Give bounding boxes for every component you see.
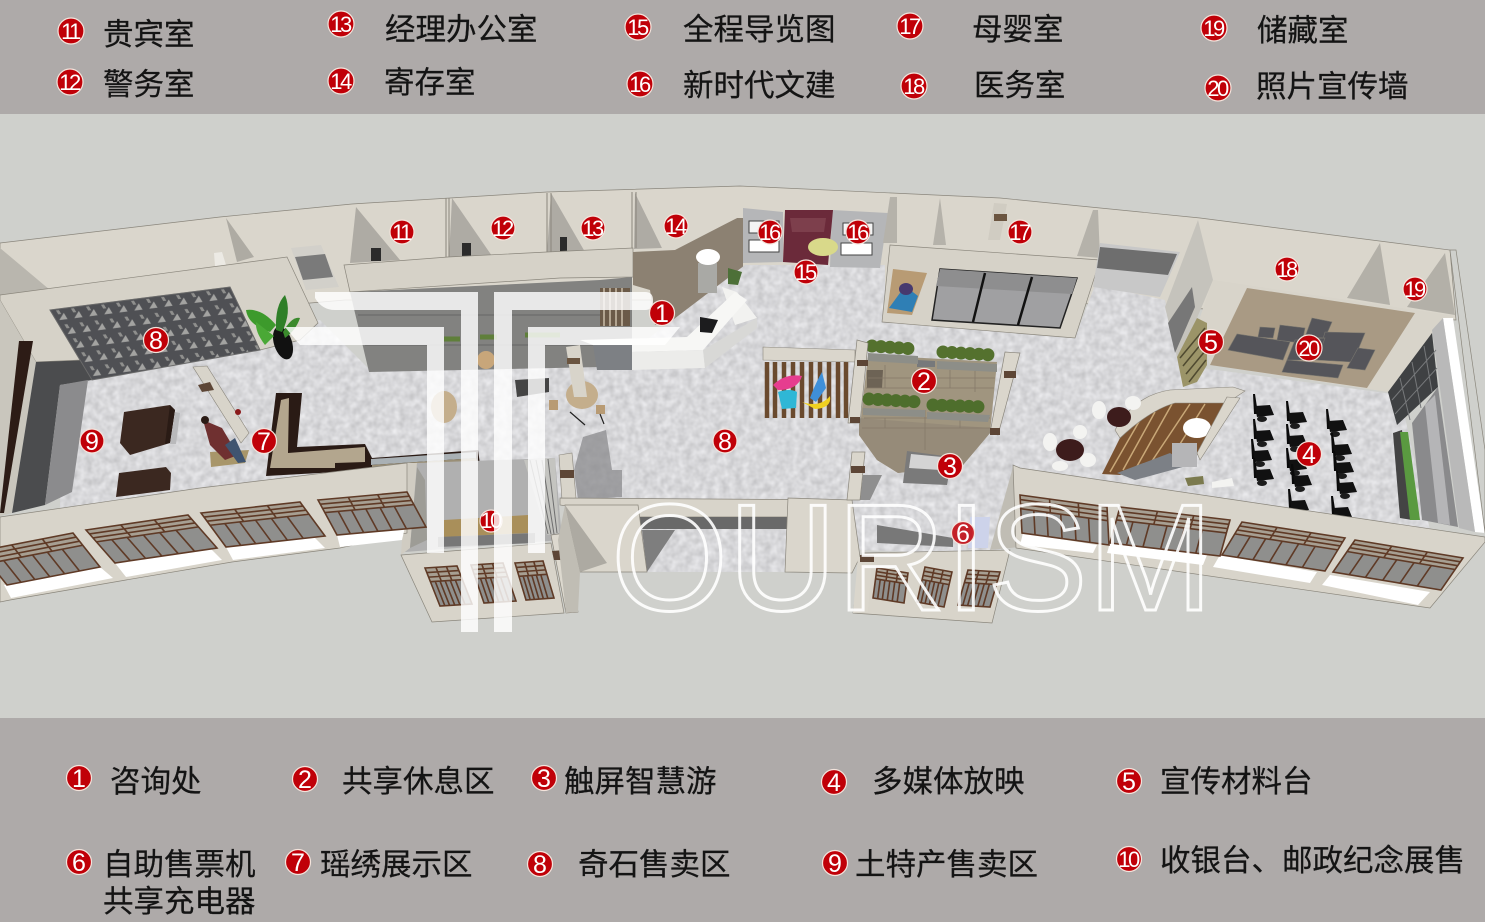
legend texts rooms 11 to 20: 全程导览图 [683, 13, 836, 47]
pillars at rest area [848, 340, 1020, 435]
grey door recess [1093, 243, 1180, 297]
map markers: 7 [257, 428, 271, 456]
legend markers 11 to 20: 20 [1207, 76, 1229, 101]
legend texts rooms 11 to 20 [103, 13, 1408, 104]
rest area wood platform [859, 355, 997, 473]
planter strip [444, 335, 560, 339]
legend markers 11 to 20: 15 [627, 15, 649, 40]
narrow recess box [291, 245, 339, 290]
legend markers 11 to 20: 14 [330, 69, 352, 94]
map markers: 19 [1404, 277, 1426, 302]
legend markers 1 to 10: 10 [1118, 847, 1140, 872]
wall box above glass doors [882, 245, 1100, 338]
legend texts areas 1 to 10: 咨询处 [110, 765, 202, 799]
map markers: 2 [917, 368, 931, 396]
right front wall [1013, 465, 1485, 608]
dark band behind the cafe [350, 277, 632, 372]
outer right wall line [1450, 250, 1485, 533]
decorative stripe wall [600, 288, 630, 326]
legend texts rooms 11 to 20: 照片宣传墙 [1256, 70, 1408, 104]
panel: bottom legend [0, 718, 1485, 922]
partition wall with grey panel [1165, 220, 1213, 357]
left end wall [0, 300, 92, 516]
photo wall tan carpet [1210, 288, 1415, 388]
legend markers 1 to 10: 7 [291, 849, 305, 877]
legend texts areas 1 to 10: 触屏智慧游 [564, 765, 716, 799]
legend markers 1 to 10: 4 [827, 769, 841, 797]
left white base strips [4, 527, 405, 598]
map markers: 4 [1302, 441, 1316, 469]
floor plan building [0, 186, 1485, 623]
legend texts rooms 11 to 20: 警务室 [103, 68, 194, 102]
leaflet shelf [1177, 318, 1207, 387]
legend texts rooms 11 to 20: 寄存室 [384, 66, 476, 100]
right entrance room 6 details [877, 467, 1020, 550]
entrance box left [401, 533, 578, 622]
photo wall frames [1228, 318, 1375, 378]
room 14 wooden wall [633, 218, 743, 325]
rock wall grid [50, 287, 260, 380]
legend markers 1 to 10: 6 [72, 849, 86, 877]
map markers [80, 214, 1427, 548]
legend texts rooms 11 to 20: 医务室 [974, 69, 1066, 103]
legend markers 1 to 10: 2 [298, 766, 312, 794]
legend texts areas 1 to 10: 多媒体放映 [872, 765, 1024, 799]
legend markers 11 to 20: 17 [899, 14, 921, 39]
map markers: 15 [795, 260, 817, 285]
panel: top legend [0, 0, 1485, 114]
legend markers 1 to 10: 9 [828, 850, 842, 878]
legend texts areas 1 to 10: 共享休息区 [342, 765, 494, 799]
legend markers 11 to 20: 16 [629, 72, 651, 97]
right white base strips [1020, 533, 1430, 605]
legend markers 1 to 10: 8 [533, 851, 547, 879]
map markers: 3 [943, 453, 957, 481]
map markers: 18 [1276, 257, 1298, 282]
guide map poster [783, 210, 838, 265]
reception counter [580, 287, 757, 370]
legend markers 11 to 20: 12 [59, 70, 81, 95]
legend texts areas 1 to 10: 自助售票机 [103, 848, 256, 882]
rooms front wall band [344, 248, 633, 292]
legend texts areas 1 to 10 [103, 765, 1465, 919]
legend markers 11 to 20: 18 [903, 74, 925, 99]
map markers: 1 [655, 300, 669, 328]
plant on counter [728, 268, 742, 285]
map markers: 11 [392, 220, 412, 245]
map markers: 12 [492, 216, 514, 241]
wooden slat screen with dragon logo [763, 347, 855, 418]
Yao embroidery pillar and figures [193, 366, 249, 467]
map markers: 14 [665, 214, 687, 239]
watermark: OURISM: OURISM [611, 473, 1213, 643]
map markers: 16 [759, 220, 781, 245]
cinema chairs [1251, 394, 1357, 524]
room 10 interior [401, 458, 562, 555]
pillar beside room 10 [559, 453, 576, 500]
map markers: 16 [847, 220, 869, 245]
lobby column [696, 249, 720, 293]
small plant and white sofa [1185, 476, 1234, 488]
legend markers 1 to 10 [66, 765, 1142, 879]
legend texts rooms 11 to 20: 母婴室 [972, 13, 1064, 47]
left corner wall shade [0, 248, 50, 295]
map markers: 8 [718, 428, 732, 456]
map markers: 20 [1298, 336, 1320, 361]
main floor [60, 265, 1430, 555]
rooms 17 side walls [883, 197, 1100, 258]
legend markers 1 to 10: 3 [537, 765, 551, 793]
legend texts areas 1 to 10: 瑶绣展示区 [320, 848, 472, 882]
map markers: 6 [956, 520, 970, 548]
legend markers 11 to 20: 19 [1203, 16, 1225, 41]
left back wall band [0, 257, 318, 380]
map marker 10: 10 [480, 508, 502, 533]
L shaped display counter [266, 393, 482, 484]
legend markers 1 to 10: 1 [72, 765, 86, 793]
legend texts rooms 11 to 20: 新时代文建 [683, 69, 836, 103]
legend texts areas 1 to 10: 宣传材料台 [1160, 765, 1312, 799]
legend markers 11 to 20: 11 [61, 19, 81, 44]
map markers: 8 [149, 327, 163, 355]
entrance box right [853, 550, 1010, 623]
guide board panels [743, 208, 888, 268]
left windows [0, 492, 426, 585]
legend texts areas 1 to 10: 共享充电器 [103, 885, 256, 919]
legend texts rooms 11 to 20: 贵宾室 [103, 18, 194, 52]
room 14 back wall [637, 192, 737, 248]
glass doors [932, 269, 1077, 328]
round tables with white chairs [1043, 396, 1141, 471]
middle front wall [558, 498, 860, 613]
map markers: 17 [1009, 220, 1031, 245]
map markers: 13 [582, 216, 604, 241]
reading pillar in lobby [847, 452, 882, 500]
legend markers 1 to 10: 5 [1122, 768, 1136, 796]
cream wall band around photo wall [1198, 280, 1455, 392]
touch screen kiosk [903, 451, 952, 485]
legend markers 11 to 20 [57, 11, 1231, 101]
right windows [1020, 495, 1463, 590]
legend texts rooms 11 to 20: 经理办公室 [385, 13, 538, 47]
legend texts areas 1 to 10: 奇石售卖区 [578, 848, 730, 882]
shadow on floor [574, 430, 622, 500]
wave poster [887, 269, 927, 315]
watermark: T logo [285, 292, 680, 632]
legend markers 11 to 20: 13 [330, 12, 352, 37]
map markers: 5 [1204, 329, 1218, 357]
legend texts areas 1 to 10: 土特产售卖区 [855, 848, 1038, 882]
planter strips [863, 346, 997, 422]
left front wall [0, 463, 407, 602]
cafe tables [431, 345, 605, 425]
legend texts areas 1 to 10: 收银台、邮政纪念展售 [1160, 844, 1465, 878]
back wall strip [0, 186, 1456, 330]
souvenir boxes [116, 405, 180, 497]
legend texts rooms 11 to 20: 储藏室 [1257, 14, 1348, 48]
right side display wall [1388, 318, 1485, 533]
rooms 11 to 14 side walls [350, 192, 662, 263]
potted palm [246, 295, 300, 362]
room 18 and 19 walls [1203, 220, 1455, 315]
arc wall with wood panel [1102, 387, 1245, 480]
map markers: 9 [85, 428, 99, 456]
